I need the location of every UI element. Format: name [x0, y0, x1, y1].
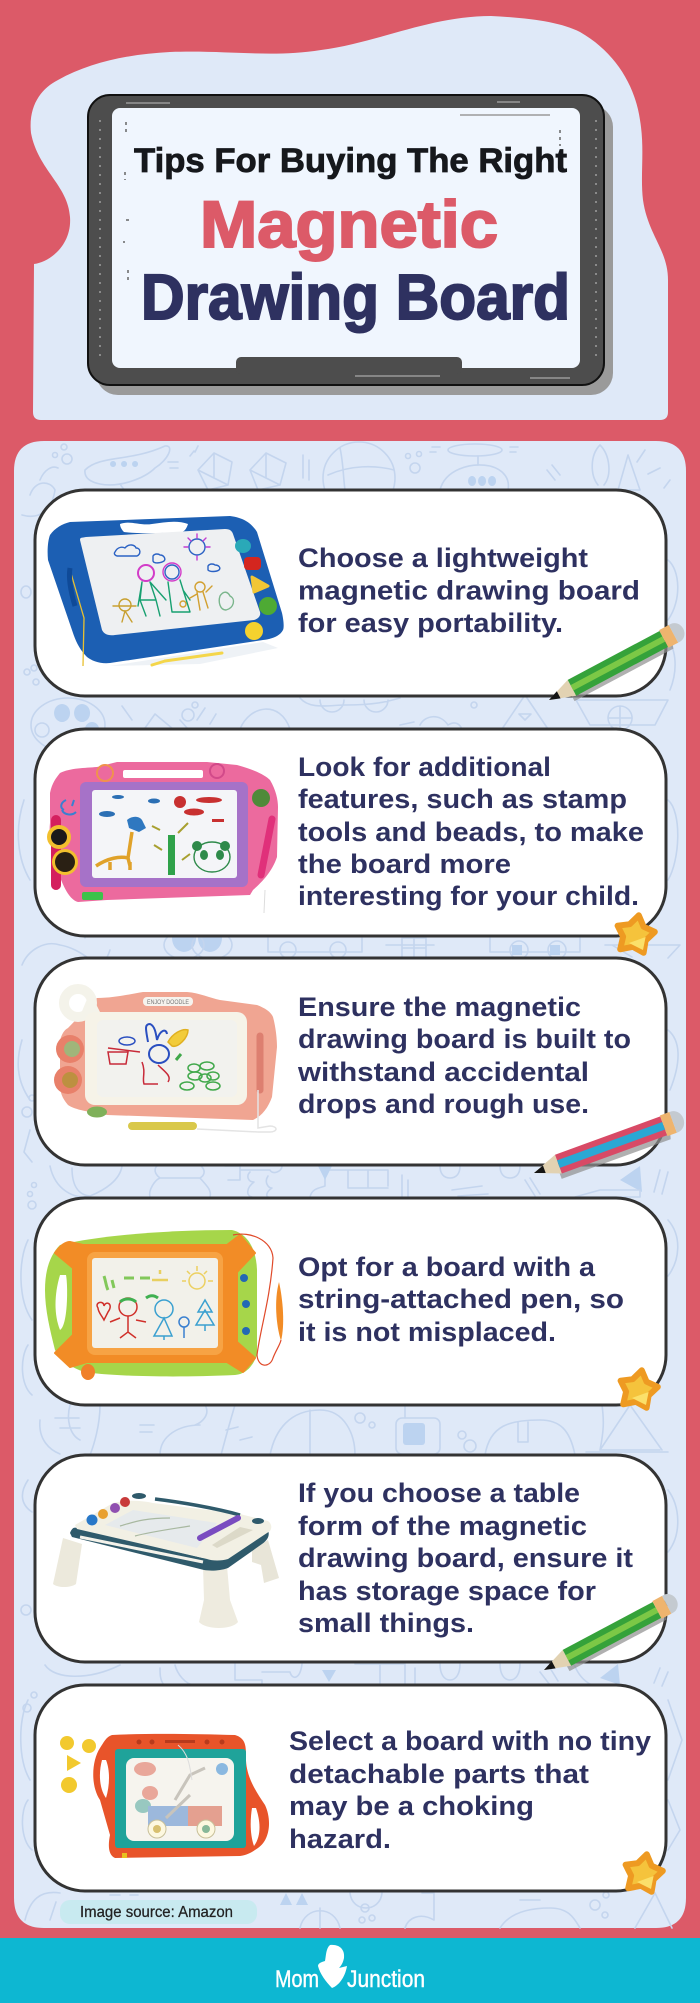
drawing [97, 1266, 214, 1340]
card 6 text: may be a choking [289, 1791, 534, 1821]
title [134, 142, 570, 333]
card 5 text: small things. [298, 1608, 474, 1638]
card 5 [35, 1455, 683, 1681]
title line 1: Tips For Buying The Right [134, 142, 567, 180]
board frame [88, 95, 604, 385]
header blob [31, 16, 668, 420]
logo: Junction [347, 1966, 425, 1993]
card 3 text: drops and rough use. [298, 1089, 589, 1119]
panel background [14, 441, 686, 1928]
card 1 box [35, 490, 666, 696]
card 6 product: orange board with stamps [60, 1734, 269, 1858]
title line 2: Magnetic [200, 187, 498, 261]
card 1 [35, 490, 689, 711]
board tray [236, 357, 462, 374]
card 5 text: If you choose a table [298, 1478, 580, 1508]
card 4 text [298, 1252, 624, 1347]
card 1 text: Choose a lightweight [298, 543, 588, 573]
buttons [235, 539, 251, 553]
card 2 text: features, such as stamp [298, 784, 627, 814]
top dots [136, 1740, 224, 1744]
card 5 text: drawing board, ensure it [298, 1543, 633, 1573]
logo icon [318, 1945, 347, 1988]
card 3 text: drawing board is built to [298, 1024, 631, 1054]
card 1 text: for easy portability. [298, 608, 563, 638]
orange body [55, 1235, 255, 1372]
table legs [53, 1538, 82, 1587]
icon: star [618, 915, 655, 953]
icon: red and blue pencil [530, 1108, 689, 1187]
shadow [110, 642, 278, 666]
card 3 text: Ensure the magnetic [298, 992, 581, 1022]
doodles: side strips [18, 560, 682, 1850]
doodles: row 3 [22, 924, 680, 965]
image source pill [60, 1900, 257, 1924]
card 3 text: withstand accidental [297, 1057, 589, 1087]
dark rim [70, 1528, 269, 1571]
logo [275, 1945, 425, 1993]
card 3 [35, 958, 689, 1187]
card 1 text: magnetic drawing board [298, 576, 640, 606]
card 3 product: peach board [54, 989, 277, 1132]
drawing [113, 534, 233, 622]
pen [152, 653, 222, 665]
card 1 text [298, 543, 640, 638]
card 2 [35, 729, 666, 953]
footer band [0, 1938, 700, 2003]
header: drawing board illustration [88, 95, 613, 395]
cream top [75, 1501, 271, 1560]
card 4 text: string-attached pen, so [298, 1284, 624, 1314]
card 6 text: Select a board with no tiny [289, 1726, 651, 1756]
card 5 text: form of the magnetic [298, 1511, 587, 1541]
doodles: top row [22, 442, 670, 516]
card 5 text [298, 1478, 633, 1638]
card 5 text: has storage space for [298, 1576, 597, 1606]
card 3 text [297, 992, 631, 1119]
card 2 text: tools and beads, to make [298, 817, 644, 847]
card 4 text: it is not misplaced. [298, 1317, 556, 1347]
stamps [51, 820, 61, 885]
card 2 text: Look for additional [298, 752, 551, 782]
card 1 product: blue board [48, 516, 284, 666]
doodles: row 7 [25, 1892, 672, 1928]
pen and string [276, 1282, 283, 1341]
white ring handle [64, 989, 92, 1017]
doodle background pattern [18, 442, 682, 1928]
card 3 product: peach board: ENJOY DOODLE [147, 1000, 189, 1006]
card 4 [35, 1198, 666, 1408]
yellow stamps [60, 1736, 74, 1750]
card 2 box [35, 729, 666, 936]
logo wordmark: Mom [275, 1966, 319, 1993]
icon: star [626, 1854, 663, 1892]
card 3 box [35, 958, 666, 1165]
card 2 text: interesting for your child. [298, 881, 639, 911]
doodles: row 4 [28, 1165, 668, 1209]
card 6 text: hazard. [289, 1824, 391, 1854]
picture [134, 1762, 156, 1776]
stylus string [70, 570, 84, 666]
doodles: row 5 [40, 1405, 668, 1455]
doodles: row 6 [45, 1664, 668, 1686]
doodles: row 2 [31, 695, 668, 752]
card 2 text: the board more [298, 849, 511, 879]
icon: green pencil [544, 620, 689, 711]
icon: star [621, 1370, 658, 1408]
card 6 text: detachable parts that [289, 1759, 589, 1789]
card 4 product: orange and green board [45, 1230, 283, 1380]
green flower [252, 789, 270, 807]
card 6 box [35, 1685, 666, 1891]
drawing [96, 795, 230, 875]
title line 3: Drawing Board [141, 261, 570, 333]
card 2 product: pink board [47, 762, 278, 913]
image source pill: Image source: Amazon [80, 1904, 233, 1921]
slots [56, 1035, 84, 1063]
card 4 box [35, 1198, 666, 1405]
card 4 text: Opt for a board with a [298, 1252, 596, 1282]
card 5 product: table board [53, 1493, 279, 1628]
card 6 text [289, 1726, 651, 1854]
board shadow [96, 105, 613, 395]
brand label [143, 997, 193, 1006]
icon: green pencil [539, 1591, 683, 1681]
card 5 box [35, 1455, 666, 1662]
pen [128, 1122, 197, 1130]
board screen [112, 108, 580, 368]
card 2 text [298, 752, 644, 911]
drawing [108, 1024, 220, 1090]
card 6 [35, 1685, 666, 1892]
